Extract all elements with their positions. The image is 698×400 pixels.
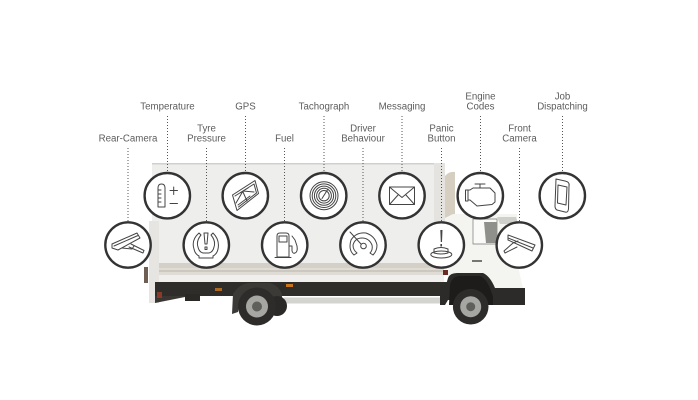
label: Driver Behaviour: Behaviour: [341, 134, 386, 144]
label: Messaging: [379, 102, 425, 172]
label: Job Dispatching: Dispatching: [537, 102, 588, 112]
label: Tyre Pressure: Tyre: [197, 124, 216, 134]
label: GPS: [235, 102, 256, 172]
label: Panic Button: Button: [427, 134, 456, 144]
icon: tachograph: [301, 173, 346, 218]
icon: front camera: [497, 222, 542, 268]
label: Front Camera: Camera: [502, 134, 537, 144]
label: Engine Codes: [465, 92, 496, 172]
cargo box: [144, 163, 445, 303]
label: Job Dispatching: Job: [555, 92, 570, 102]
icon: messaging: [379, 173, 425, 218]
label: GPS: GPS: [235, 102, 256, 112]
icon: rear camera: [105, 222, 151, 268]
label: Job Dispatching: [537, 92, 588, 172]
label: Tachograph: Tachograph: [299, 102, 349, 112]
icon: tyre pressure: [184, 222, 229, 268]
truck photo: [144, 163, 525, 326]
icon: panic button: [419, 222, 464, 268]
label: Panic Button: [427, 124, 456, 222]
front wheel: [453, 289, 489, 325]
label: Messaging: Messaging: [379, 102, 425, 112]
label: Engine Codes: Engine: [465, 92, 496, 102]
icon: driver behaviour: [340, 222, 386, 268]
label: Driver Behaviour: [341, 124, 386, 222]
label: Rear-Camera: Rear-Camera: [99, 134, 158, 144]
label: Temperature: Temperature: [140, 102, 195, 112]
label: Tyre Pressure: [187, 124, 226, 222]
icon: fuel: [262, 222, 307, 268]
chassis: [155, 282, 447, 304]
label: Panic Button: Panic: [429, 124, 454, 134]
label: Tyre Pressure: Pressure: [187, 134, 226, 144]
icon: GPS: [223, 173, 268, 218]
label: Temperature: [140, 102, 195, 172]
label: Front Camera: Front: [508, 124, 531, 134]
label: Tachograph: [299, 102, 349, 172]
label: Fuel: [275, 134, 294, 222]
label: Engine Codes: Codes: [466, 102, 495, 112]
rear wheel: [232, 283, 287, 326]
label: Rear-Camera: [99, 134, 158, 222]
icon: temperature: [145, 173, 190, 218]
icon: job dispatching: [540, 173, 585, 218]
label: Front Camera: [502, 124, 537, 222]
label: Driver Behaviour: Driver: [350, 124, 377, 134]
icon: engine: [458, 173, 503, 218]
label: Fuel: Fuel: [275, 134, 294, 144]
cab: [440, 172, 525, 305]
